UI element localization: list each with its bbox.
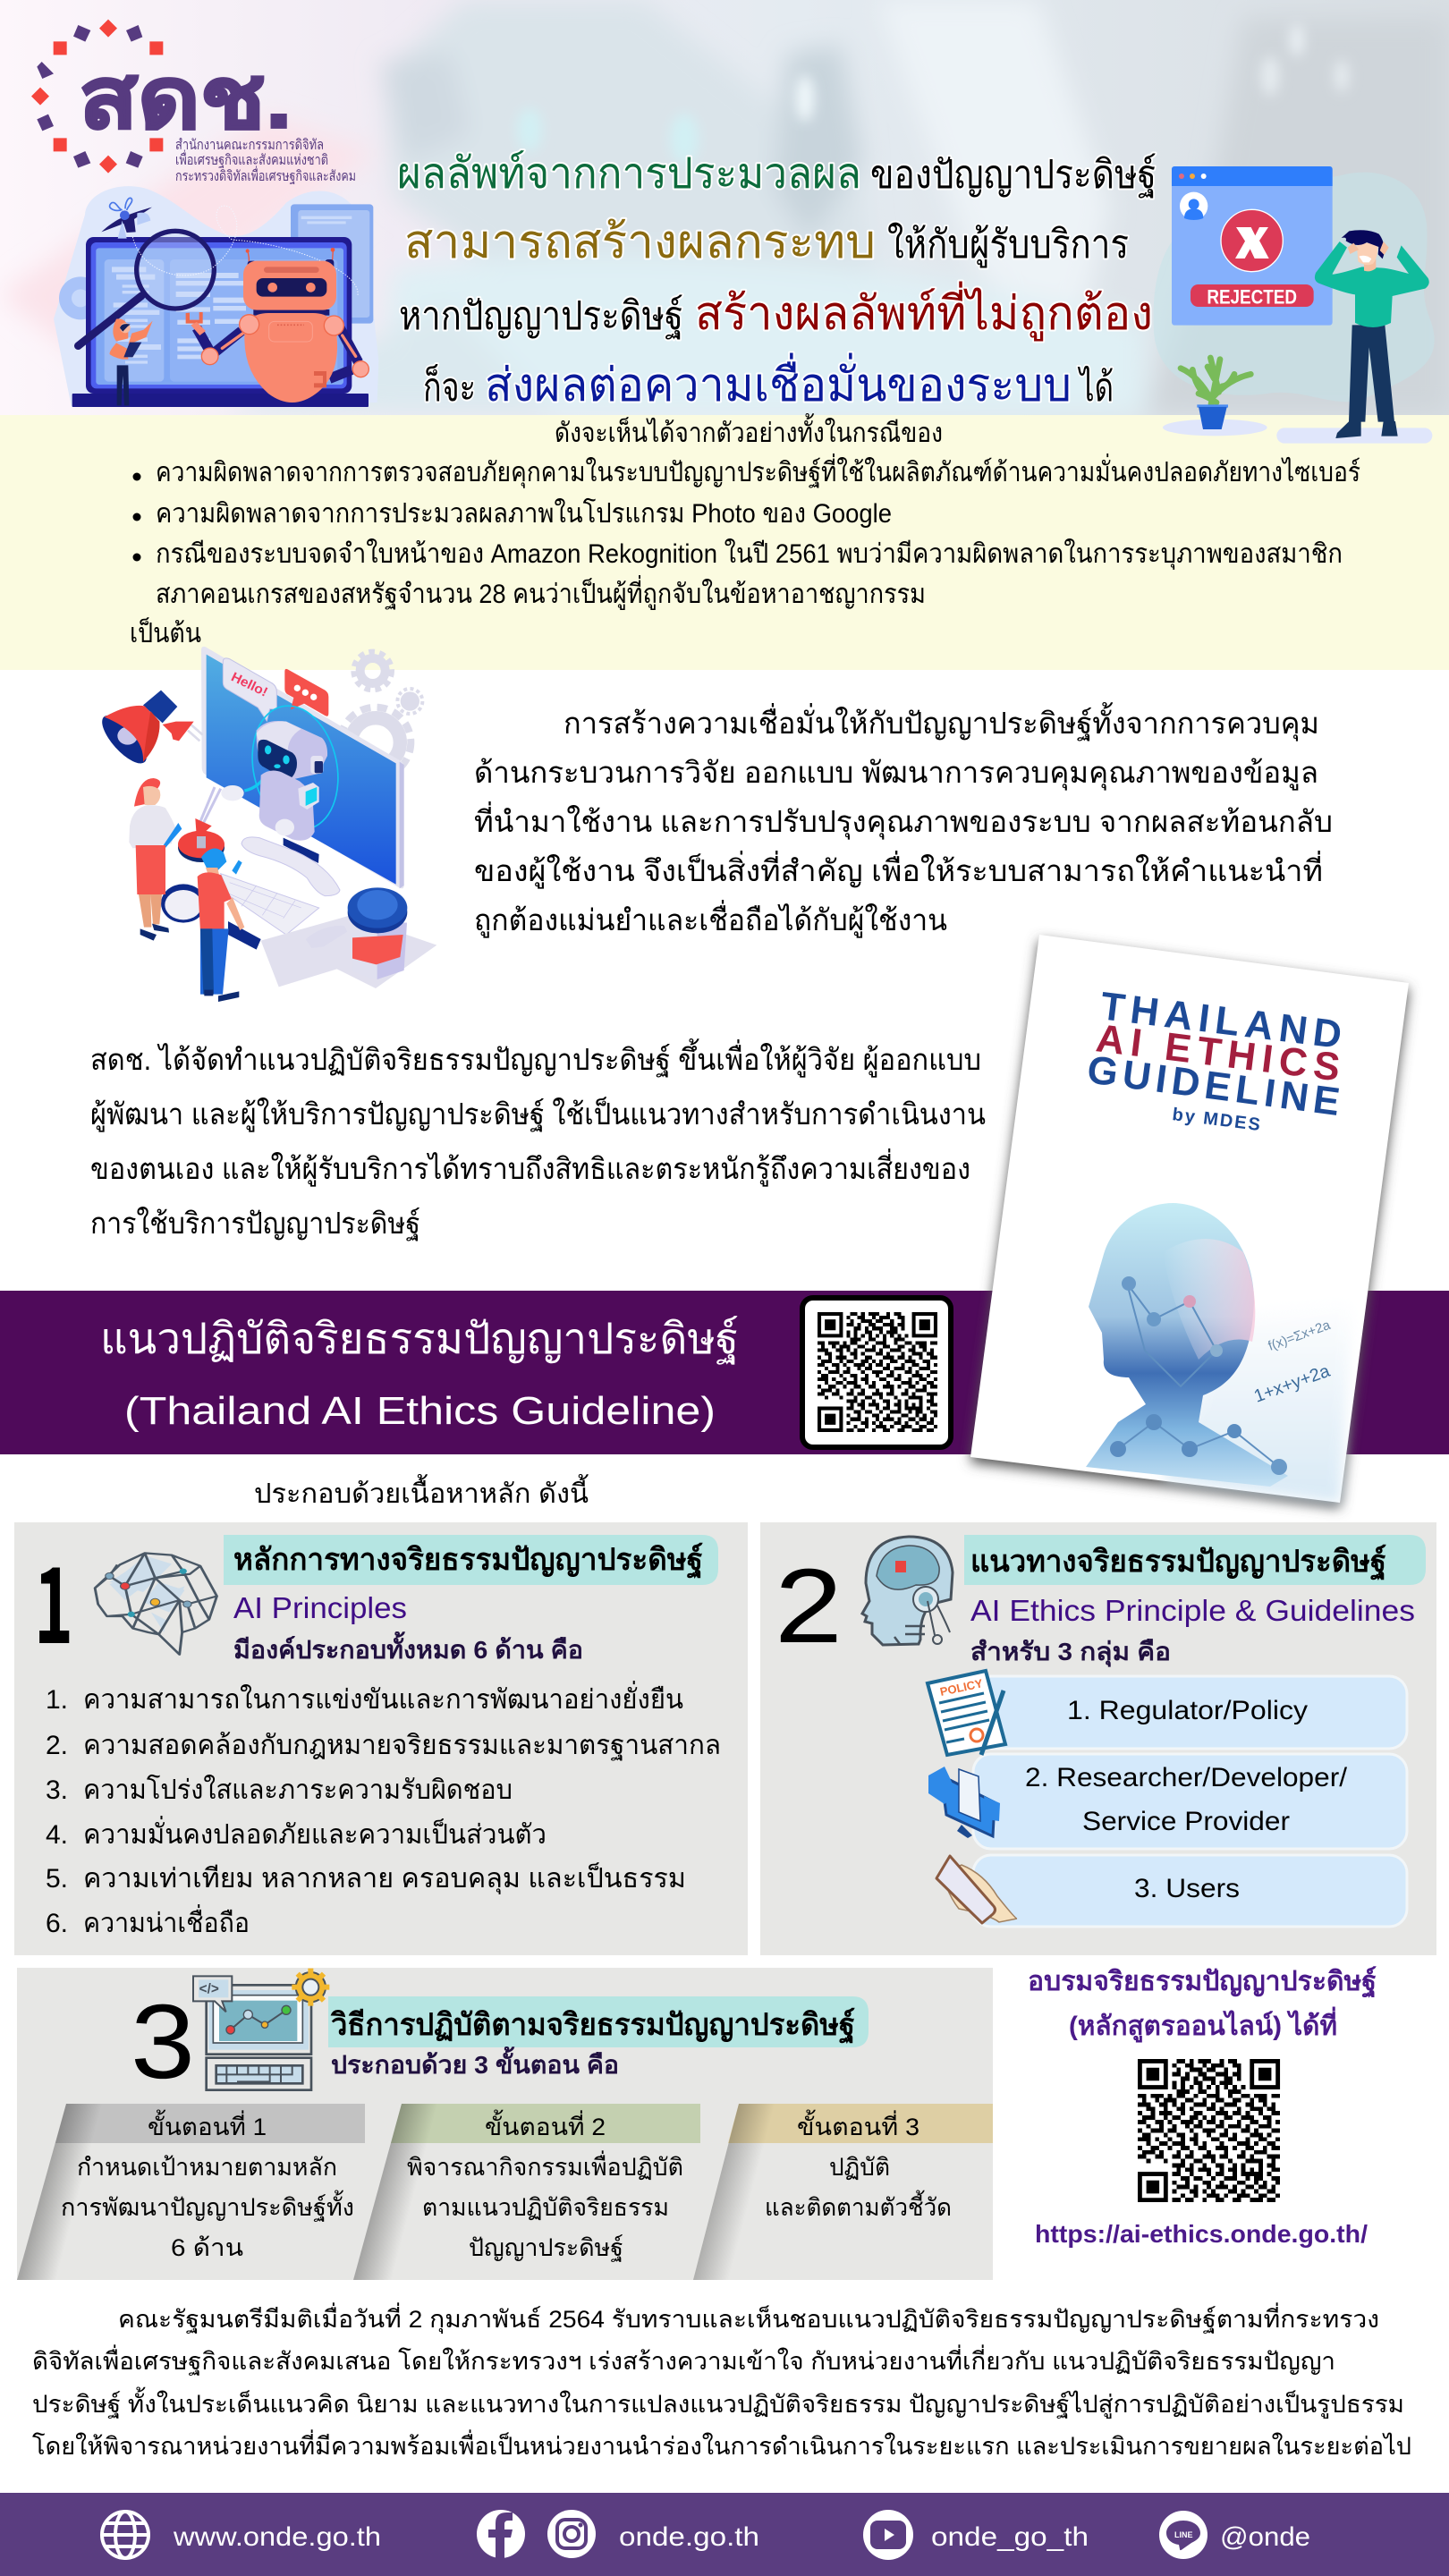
book cover: f(x)=Σx+2a — [1267, 1318, 1333, 1354]
illustration: rejected window, plant and worried man — [1154, 166, 1435, 444]
banner: guideline title: (Thailand AI Ethics Guideline) — [124, 1389, 716, 1433]
principles list: ความเท่าเทียม หลากหลาย ครอบคลุม และเป็นธรรม — [83, 1861, 686, 1895]
examples list: เป็นต้น — [130, 616, 201, 648]
heading 2: แนวทางจริยธรรมปัญญาประดิษฐ์ — [970, 1544, 1386, 1581]
step 2: ขั้นตอนที่ 2 — [485, 2109, 606, 2140]
QR code: guideline — [802, 1298, 951, 1447]
section intro: ประกอบด้วยเนื้อหาหลัก ดังนี้ — [254, 1474, 589, 1509]
step 1: 6 ด้าน — [171, 2234, 243, 2261]
principles list: ความน่าเชื่อถือ — [83, 1904, 250, 1938]
book cover — [970, 935, 1409, 1508]
line handle: @onde — [1220, 2522, 1310, 2552]
icon: policy document: POLICY — [939, 1676, 984, 1699]
QR code: training — [1138, 2059, 1280, 2202]
paragraph: building trust: ด้านกระบวนการวิจัย ออกแบบ พัฒนาการควบคุมคุณภาพของข้อมูล — [474, 756, 1318, 791]
logo subtitle: กระทรวงดิจิทัลเพื่อเศรษฐกิจและสังคม — [175, 165, 356, 184]
icon: facebook — [477, 2510, 525, 2558]
paragraph: building trust: ที่นำมาใช้งาน และการปรับปรุงคุณภาพของระบบ จากผลสะท้อนกลับ — [474, 801, 1333, 840]
paragraph: building trust: ของผู้ใช้งาน จึงเป็นสิ่งที่สำคัญ เพื่อให้ระบบสามารถให้คำแนะนำที่ — [474, 851, 1323, 889]
group box 3: 3. Users — [1134, 1874, 1240, 1903]
panel: 3 implementation — [17, 1968, 993, 2280]
facebook and instagram handle: onde.go.th — [619, 2522, 759, 2552]
principles list: 1. — [46, 1685, 68, 1715]
icon: code computer — [193, 1969, 329, 2090]
headline line 3 — [399, 281, 1153, 342]
step 2: ตามแนวปฏิบัติจริยธรรม — [422, 2194, 669, 2221]
logo subtitle: สำนักงานคณะกรรมการดิจิทัล — [175, 138, 324, 153]
paragraph: building trust — [474, 702, 1333, 938]
principles list: ความสอดคล้องกับกฎหมายจริยธรรมและมาตรฐานสากล — [83, 1731, 721, 1761]
paragraph: ONDE guideline: ของตนเอง และให้ผู้รับบริการได้ทราบถึงสิทธิและตระหนักรู้ถึงความเสี่ยงของ — [90, 1148, 970, 1187]
description 3: ประกอบด้วย 3 ขั้นตอน คือ — [331, 2046, 619, 2079]
description 2: สำหรับ 3 กลุ่ม คือ — [970, 1638, 1171, 1667]
examples list: สภาคอนเกรสของสหรัฐจำนวน 28 คนว่าเป็นผู้ที่ถูกจับในข้อหาอาชญากรรม — [156, 575, 926, 610]
icon: instagram — [547, 2510, 596, 2558]
group box 1: 1. Regulator/Policy — [1067, 1696, 1308, 1725]
principles list: 4. — [46, 1820, 68, 1850]
logo subtitle — [175, 138, 356, 184]
rejected label: REJECTED — [1207, 285, 1297, 308]
group box 2: Service Provider — [1082, 1807, 1290, 1836]
description 1: มีองค์ประกอบทั้งหมด 6 ด้าน คือ — [233, 1631, 583, 1664]
headline line 1 — [397, 150, 1157, 198]
title pill 3 — [328, 1996, 869, 2047]
banner: guideline title — [0, 1291, 1449, 1454]
illustration: robot examining laptop — [54, 186, 378, 407]
icon: globe — [102, 2512, 148, 2558]
headline line 1: ผลลัพท์จากการประมวลผล — [397, 150, 861, 198]
headline line 2 — [404, 216, 1129, 268]
numeral 1: 1 — [34, 1521, 73, 1674]
examples list: กรณีของระบบจดจำใบหน้าของ Amazon Rekognition ในปี 2561 พบว่ามีความผิดพลาดในการระบุภาพของสมาชิก — [156, 538, 1343, 571]
paragraph: building trust: ถูกต้องแม่นยำและเชื่อถือได้กับผู้ใช้งาน — [474, 900, 947, 938]
step 1: ขั้นตอนที่ 1 — [148, 2109, 267, 2140]
principles list: ความมั่นคงปลอดภัยและความเป็นส่วนตัว — [83, 1816, 547, 1850]
examples list — [130, 453, 1360, 648]
step 2 — [353, 2104, 700, 2280]
group box 2 — [973, 1754, 1407, 1849]
step 2: ปัญญาประดิษฐ์ — [469, 2233, 623, 2262]
icon: network brain — [95, 1553, 216, 1655]
banner: guideline title: แนวปฏิบัติจริยธรรมปัญญาประดิษฐ์ — [100, 1316, 739, 1364]
logo — [31, 20, 292, 174]
title pill 2 — [964, 1535, 1426, 1585]
title pill 1 — [224, 1535, 718, 1585]
principles list: ความสามารถในการแข่งขันและการพัฒนาอย่างยั่งยืน — [83, 1681, 683, 1715]
paragraph: ONDE guideline: การใช้บริการปัญญาประดิษฐ์ — [90, 1207, 420, 1241]
headline line 2: ให้กับผู้รับบริการ — [887, 222, 1129, 268]
panel: examples band — [0, 415, 1449, 670]
principles list: 6. — [46, 1909, 68, 1938]
paragraph: cabinet resolution: คณะรัฐมนตรีมีมติเมื่อวันที่ 2 กุมภาพันธ์ 2564 รับทราบและเห็นชอบแนวปฏิบัติจริยธรรมปัญญาประดิษฐ์ตามที่กระทรวง — [118, 2302, 1379, 2334]
icon: hand with phone — [936, 1856, 1017, 1923]
book cover: GUIDELINE — [1085, 1047, 1343, 1124]
website: www.onde.go.th — [173, 2522, 381, 2552]
group box 3 — [973, 1855, 1407, 1927]
book cover: 1+x+y+2a — [1251, 1360, 1334, 1407]
group box 2: 2. Researcher/Developer/ — [1025, 1763, 1348, 1792]
book cover: by MDES — [1171, 1105, 1263, 1135]
subheading 1: AI Principles — [233, 1591, 407, 1624]
step 3 — [693, 2104, 993, 2280]
illustration: isometric robot on monitor with people — [95, 647, 436, 1002]
headline line 3: สร้างผลลัพท์ที่ไม่ถูกต้อง — [695, 281, 1153, 342]
training call to action: https://ai-ethics.onde.go.th/ — [1035, 2220, 1368, 2248]
heading 1: หลักการทางจริยธรรมปัญญาประดิษฐ์ — [233, 1542, 703, 1580]
step 1: กำหนดเป้าหมายตามหลัก — [77, 2154, 337, 2181]
headline line 1: ของปัญญาประดิษฐ์ — [870, 153, 1157, 198]
step 3: ขั้นตอนที่ 3 — [797, 2109, 919, 2140]
subheading 2: AI Ethics Principle & Guidelines — [970, 1594, 1415, 1627]
headline line 2: สามารถสร้างผลกระทบ — [404, 216, 876, 268]
numeral 2: 2 — [775, 1547, 843, 1665]
logo wordmark: สดช. — [79, 51, 292, 146]
group box 1 — [973, 1676, 1407, 1749]
numeral 3: 3 — [131, 1983, 195, 2101]
paragraph: ONDE guideline — [90, 1038, 986, 1241]
step 1 — [17, 2104, 365, 2280]
paragraph: cabinet resolution: ประดิษฐ์ ทั้งในประเด็นแนวคิด นิยาม และแนวทางในการแปลงแนวปฏิบัติจริยธรรม ปัญญาประดิษฐ์ไปสู่การปฏิบัติอย่างเป็นรูปธรรม — [32, 2386, 1404, 2419]
paragraph: cabinet resolution: โดยให้พิจารณาหน่วยงานที่มีความพร้อมเพื่อเป็นหน่วยงานนำร่องในการดำเนินการในระยะแรก และประเมินการขยายผลในระยะต่อไป — [32, 2429, 1411, 2460]
header background photo — [0, 0, 1449, 415]
icon: policy document — [928, 1671, 1005, 1755]
book cover: THAILAND — [1098, 984, 1344, 1057]
training call to action: (หลักสูตรออนไลน์) ได้ที่ — [1069, 2006, 1337, 2043]
paragraph: ONDE guideline: ผู้พัฒนา และผู้ให้บริการปัญญาประดิษฐ์ ใช้เป็นแนวทางสำหรับการดำเนินงาน — [90, 1097, 986, 1132]
principles list: ความโปร่งใสและภาระความรับผิดชอบ — [83, 1774, 513, 1805]
icon: developer monitor — [928, 1767, 1000, 1838]
logo subtitle: เพื่อเศรษฐกิจและสังคมแห่งชาติ — [175, 149, 328, 168]
headline line 4: ได้ — [1078, 365, 1114, 410]
headline line 4: ส่งผลต่อความเชื่อมั่นของระบบ — [485, 352, 1072, 411]
paragraph: cabinet resolution: ดิจิทัลเพื่อเศรษฐกิจและสังคมเสนอ โดยให้กระทรวงฯ เร่งสร้างความเข้าใจ กับหน่วยงานที่เกี่ยวกับ แนวปฏิบัติจริยธรรมปัญญา — [32, 2344, 1335, 2376]
step 3: และติดตามตัวชี้วัด — [765, 2190, 952, 2221]
icon: head with chip — [862, 1537, 953, 1645]
panel: 1 AI principles — [14, 1521, 748, 1955]
icon: youtube — [863, 2510, 913, 2560]
icon: code computer: </> — [199, 1981, 219, 1996]
step 3: ปฏิบัติ — [829, 2154, 890, 2181]
youtube handle: onde_go_th — [931, 2522, 1089, 2552]
principles list: 5. — [46, 1864, 68, 1894]
examples list: ความผิดพลาดจากการประมวลผลภาพในโปรแกรม Photo ของ Google — [156, 497, 892, 529]
principles list: 3. — [46, 1775, 68, 1805]
training call to action — [1028, 1966, 1377, 2248]
step 1: การพัฒนาปัญญาประดิษฐ์ทั้ง — [61, 2190, 354, 2222]
panel: 2 AI ethics principle and guidelines — [760, 1522, 1436, 1955]
paragraph: ONDE guideline: สดช. ได้จัดทำแนวปฏิบัติจริยธรรมปัญญาประดิษฐ์ ขึ้นเพื่อให้ผู้วิจัย ผู้ออกแบบ — [90, 1038, 981, 1078]
principles list — [46, 1681, 721, 1938]
headline line 3: หากปัญญาประดิษฐ์ — [399, 294, 683, 339]
paragraph: building trust: การสร้างความเชื่อมั่นให้กับปัญญาประดิษฐ์ทั้งจากการควบคุม — [564, 702, 1319, 741]
heading 3: วิธีการปฏิบัติตามจริยธรรมปัญญาประดิษฐ์ — [330, 2007, 855, 2045]
example heading: ดังจะเห็นได้จากตัวอย่างทั้งในกรณีของ — [555, 413, 943, 448]
icon: line: LINE — [1174, 2530, 1193, 2539]
hello label: Hello! — [229, 670, 270, 700]
training call to action: อบรมจริยธรรมปัญญาประดิษฐ์ — [1028, 1966, 1377, 1999]
paragraph: cabinet resolution — [32, 2302, 1411, 2460]
step 2: พิจารณากิจกรรมเพื่อปฏิบัติ — [407, 2150, 683, 2181]
icon: line — [1159, 2511, 1208, 2559]
headline line 4: ก็จะ — [423, 364, 476, 410]
book cover: AI ETHICS — [1094, 1016, 1343, 1089]
footer bar — [0, 2493, 1449, 2576]
principles list: 2. — [46, 1731, 68, 1760]
